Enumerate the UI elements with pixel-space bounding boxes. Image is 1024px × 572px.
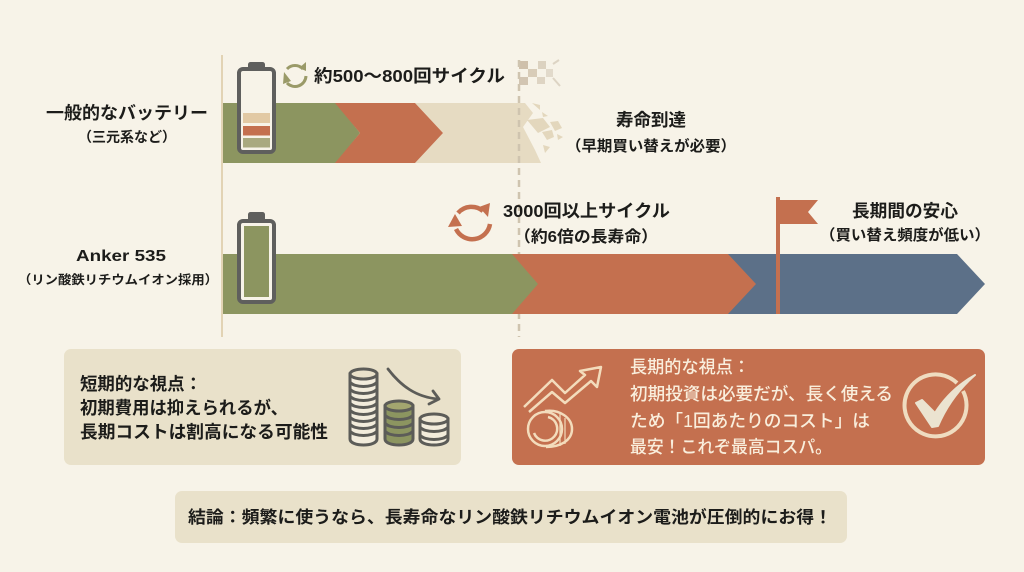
row: general battery <box>46 60 736 163</box>
text: short-term view <box>80 374 328 442</box>
icon: downward arrow <box>388 369 439 404</box>
icon: cycle arrows <box>283 62 306 86</box>
text: conclusion: 結論：頻繁に使うなら、長寿命なリン酸鉄リチウムイオン電池が圧倒的にお得！ <box>188 507 832 527</box>
icon: rising arrow with coin <box>524 367 601 447</box>
text: long-term view: ため「1回あたりのコスト」は <box>630 411 870 431</box>
icon: fading checkered flag <box>519 60 560 86</box>
text: 3000 cycles: 3000回以上サイクル <box>503 201 670 221</box>
text: long-term view: 長期的な視点： <box>630 357 750 377</box>
text: long-term view: 初期投資は必要だが、長く使える <box>630 384 893 404</box>
label: general battery: 一般的なバッテリー <box>46 103 208 123</box>
icon: battery full <box>239 212 274 302</box>
text: end of life <box>566 110 736 155</box>
text: short-term view: 初期費用は抑えられるが、 <box>80 398 288 418</box>
text: long-term peace of mind: 長期間の安心 <box>852 201 959 221</box>
icon: large cycle arrows <box>448 203 490 239</box>
label: general battery: （三元系など） <box>78 129 176 145</box>
icon: goal flag <box>776 197 818 314</box>
panel: long-term view <box>512 349 985 465</box>
icon: battery low <box>239 62 274 152</box>
timeline bar: general battery <box>223 103 541 163</box>
icon: decreasing coin stacks <box>350 369 448 445</box>
text: end of life: 寿命到達 <box>616 110 686 130</box>
row: Anker 535 <box>18 197 990 314</box>
label: Anker 535: Anker 535 <box>76 248 166 265</box>
text: long-term view <box>630 357 893 457</box>
text: cycle count 500-800: 約500〜800回サイクル <box>314 66 505 86</box>
panel: conclusion <box>175 491 847 543</box>
timeline bar: Anker 535 <box>223 254 985 314</box>
text: short-term view: 短期的な視点： <box>80 374 202 394</box>
label: Anker 535 <box>18 248 218 287</box>
text: long-term peace of mind <box>820 201 990 244</box>
crumbling bar fragments <box>527 103 563 153</box>
text: 3000 cycles <box>503 201 670 246</box>
text: end of life: （早期買い替えが必要） <box>566 137 736 155</box>
label: general battery <box>46 103 208 145</box>
text: 3000 cycles: （約6倍の長寿命） <box>514 228 658 246</box>
panel: short-term view <box>64 349 461 465</box>
icon: check mark in circle <box>905 374 975 436</box>
text: long-term peace of mind: （買い替え頻度が低い） <box>820 226 990 244</box>
text: short-term view: 長期コストは割高になる可能性 <box>80 422 328 442</box>
text: long-term view: 最安！これぞ最高コスパ。 <box>630 437 832 457</box>
label: Anker 535: （リン酸鉄リチウムイオン採用） <box>18 272 218 287</box>
